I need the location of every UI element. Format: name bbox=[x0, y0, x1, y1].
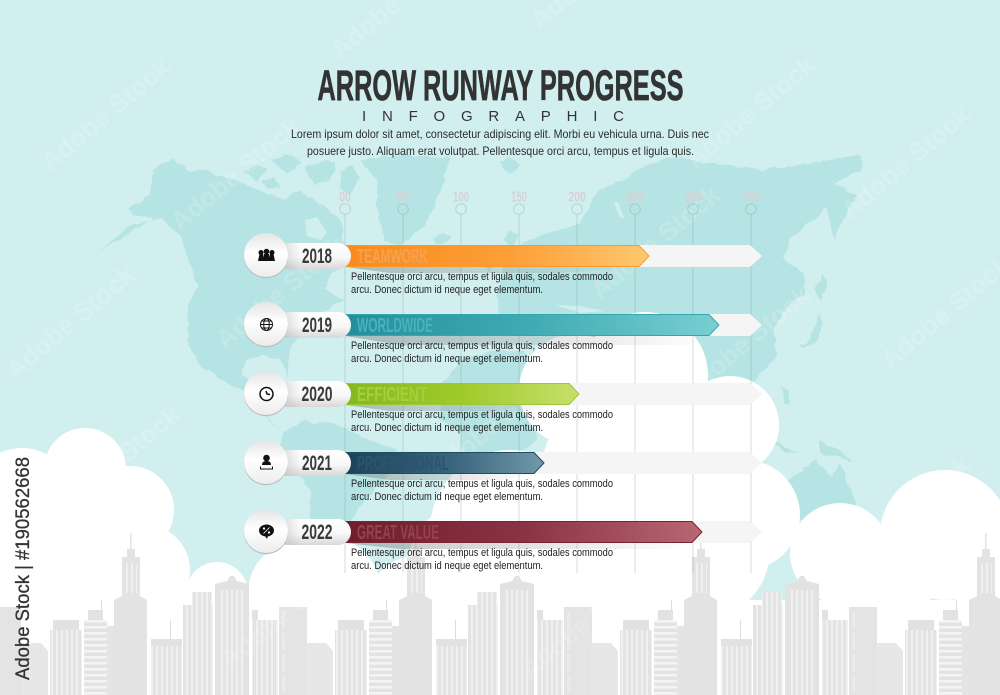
description 2021: Pellentesque orci arcu, tempus et ligula quis, sodales commodo bbox=[351, 478, 613, 490]
progress arrow 2018 bbox=[345, 246, 649, 266]
axis scale bbox=[339, 188, 760, 573]
pill 2021 bbox=[275, 450, 351, 476]
year 2018: 2018 bbox=[302, 245, 332, 268]
axis scale: 200 bbox=[568, 188, 586, 206]
row: 2019 worldwide bbox=[244, 302, 762, 365]
track arrow 2021 bbox=[345, 452, 762, 474]
pill 2018 bbox=[275, 243, 351, 269]
description 2022: Pellentesque orci arcu, tempus et ligula quis, sodales commodo bbox=[351, 547, 613, 559]
watermark tiles: Adobe Stock bbox=[675, 279, 816, 405]
pill 2022 bbox=[275, 519, 351, 545]
watermark tiles: Adobe Stock bbox=[835, 99, 976, 225]
axis scale: 300 bbox=[684, 188, 702, 206]
watermark tiles: Adobe Stock bbox=[515, 559, 656, 685]
bar label 2019: WORLDWIDE bbox=[357, 315, 433, 337]
description 2021 bbox=[351, 478, 613, 503]
icon: clock bbox=[260, 388, 273, 400]
subtitle: INFOGRAPHIC bbox=[362, 108, 624, 125]
track arrow 2019 bbox=[345, 314, 762, 336]
disc 2021 bbox=[244, 440, 288, 485]
axis scale: 100 bbox=[453, 188, 469, 206]
bar label 2022: GREAT VALUE bbox=[357, 522, 439, 544]
watermark tiles: Adobe Stock bbox=[425, 359, 566, 485]
description 2020: Pellentesque orci arcu, tempus et ligula quis, sodales commodo bbox=[351, 409, 613, 421]
watermark tiles: Adobe Stock bbox=[835, 449, 976, 575]
shadow 2021 bbox=[345, 474, 535, 480]
shadow 2022 bbox=[345, 543, 693, 549]
bar label 2020: EFFICIENT bbox=[357, 384, 427, 406]
progress arrow 2020 bbox=[345, 384, 579, 404]
intro paragraph: posuere justo. Aliquam erat volutpat. Pellentesque orci arcu, tempus et ligula quis. bbox=[307, 144, 694, 158]
pill 2019 bbox=[275, 312, 351, 338]
watermark tiles: Adobe Stock bbox=[45, 399, 186, 525]
row: 2021 professional bbox=[244, 440, 762, 503]
watermark tiles: Adobe Stock bbox=[585, 179, 726, 305]
progress arrow 2021 bbox=[345, 452, 544, 474]
description 2019: arcu. Donec dictum id neque eget elementum. bbox=[351, 353, 543, 365]
description 2018: Pellentesque orci arcu, tempus et ligula quis, sodales commodo bbox=[351, 271, 613, 283]
axis scale: 150 bbox=[511, 188, 527, 206]
description 2018: arcu. Donec dictum id neque eget elementum. bbox=[351, 284, 543, 296]
intro paragraph bbox=[291, 127, 709, 158]
icon: globe bbox=[260, 318, 272, 330]
year 2019: 2019 bbox=[302, 314, 332, 337]
disc 2020 bbox=[244, 371, 288, 416]
watermark tiles: Adobe Stock bbox=[165, 111, 306, 237]
axis scale: 350 bbox=[742, 188, 760, 206]
world map bbox=[100, 154, 862, 552]
shadow 2019 bbox=[345, 336, 710, 345]
stock credit: Adobe Stock | #190562668 bbox=[13, 457, 34, 680]
pill 2020 bbox=[275, 381, 351, 407]
watermark tiles: Adobe Stock bbox=[210, 229, 351, 355]
row: 2018 teamwork bbox=[244, 233, 762, 296]
clouds bbox=[0, 312, 1000, 695]
description 2022 bbox=[351, 547, 613, 572]
year 2022: 2022 bbox=[302, 521, 332, 544]
city skyline bbox=[0, 533, 1000, 695]
description 2021: arcu. Donec dictum id neque eget elementum. bbox=[351, 491, 543, 503]
axis scale: 250 bbox=[626, 188, 644, 206]
intro paragraph: Lorem ipsum dolor sit amet, consectetur adipiscing elit. Morbi eu vehicula urna. Duis nec bbox=[291, 127, 709, 141]
disc 2018 bbox=[244, 233, 288, 278]
description 2020: arcu. Donec dictum id neque eget elementum. bbox=[351, 422, 543, 434]
bar label 2021: PROFESSIONAL bbox=[357, 453, 449, 475]
icon: team bbox=[258, 249, 275, 261]
track arrow 2022 bbox=[345, 521, 762, 543]
year 2020: 2020 bbox=[302, 383, 332, 406]
track arrow 2020 bbox=[345, 383, 762, 405]
track arrow 2018 bbox=[345, 245, 762, 267]
shadow 2018 bbox=[345, 267, 640, 273]
axis scale: 00 bbox=[339, 188, 351, 206]
watermark tiles: Adobe Stock bbox=[35, 51, 176, 177]
description 2020 bbox=[351, 409, 613, 434]
icon: user tray bbox=[260, 455, 272, 469]
description 2019: Pellentesque orci arcu, tempus et ligula quis, sodales commodo bbox=[351, 340, 613, 352]
axis scale: 50 bbox=[397, 188, 409, 206]
description 2022: arcu. Donec dictum id neque eget elementum. bbox=[351, 560, 543, 572]
title: ARROW RUNWAY PROGRESS bbox=[318, 62, 684, 110]
row: 2022 great value bbox=[244, 509, 762, 572]
shadow 2020 bbox=[345, 405, 570, 411]
disc 2019 bbox=[244, 302, 288, 347]
description 2018 bbox=[351, 271, 613, 296]
watermark tiles: Adobe Stock bbox=[0, 259, 141, 385]
progress arrow 2022 bbox=[345, 522, 702, 542]
icon: percent bubble bbox=[259, 524, 274, 539]
disc 2022 bbox=[244, 509, 288, 554]
map inlets bbox=[305, 172, 624, 313]
progress arrow 2019 bbox=[345, 314, 719, 336]
row: 2020 efficient bbox=[244, 371, 762, 434]
year 2021: 2021 bbox=[302, 452, 332, 475]
description 2019 bbox=[351, 340, 613, 365]
watermark tiles: Adobe Stock bbox=[680, 49, 821, 175]
bar label 2018: TEAMWORK bbox=[357, 246, 428, 268]
watermark tiles: Adobe Stock bbox=[215, 549, 356, 675]
